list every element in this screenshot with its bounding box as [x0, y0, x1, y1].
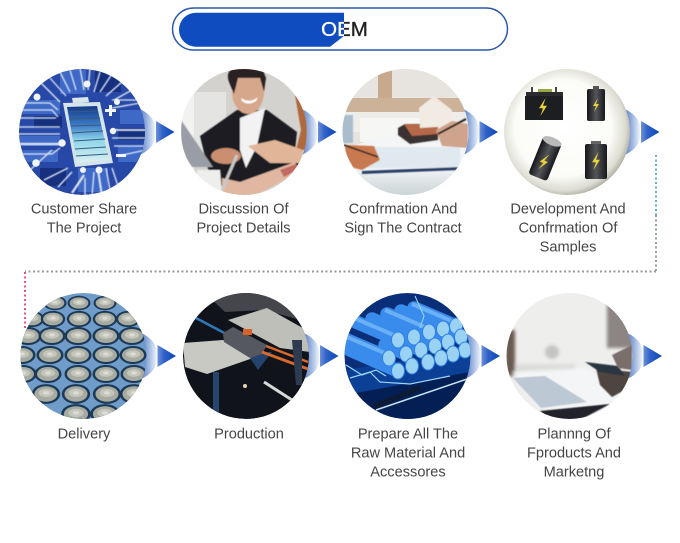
photo: laptop and phone [505, 293, 635, 420]
step 3: confirmation and sign the contract [340, 68, 498, 236]
step 5: delivery [8, 293, 176, 442]
photo: businessman in discussion [180, 68, 308, 196]
photo: battery samples [504, 69, 630, 195]
photo: rows of battery cells [20, 293, 146, 419]
label: Accessores [370, 464, 446, 480]
title banner: OEM [172, 8, 508, 50]
photo: battery pack assembly [183, 293, 310, 419]
step 8: planning of products and marketing [505, 293, 662, 480]
label: Raw Material And [351, 446, 465, 462]
photo: battery on circuit board [18, 68, 146, 196]
label: Delivery [58, 426, 111, 442]
step 2: discussion of project details [180, 68, 336, 236]
label: Prepare All The [358, 426, 458, 442]
label: The Project [47, 220, 121, 236]
photo: signing a contract [340, 68, 470, 196]
label: Confrmation And [349, 202, 457, 218]
label: Customer Share [31, 202, 137, 218]
label: Discussion Of [198, 202, 289, 218]
label: Confrmation Of [519, 220, 618, 236]
step 7: prepare all the raw material and accessories [344, 293, 500, 480]
icon: cylinder battery bottom [585, 141, 607, 179]
label: Plannng Of [537, 426, 611, 442]
label: Marketng [544, 464, 604, 480]
step 1: customer share the project [18, 68, 174, 236]
connector: dotted line between rows [25, 155, 656, 330]
step 6: production [183, 293, 338, 442]
photo: blue cylindrical cells [344, 293, 472, 420]
label: Sign The Contract [344, 220, 462, 236]
icon: cylinder battery top [587, 86, 605, 121]
label: Fproducts And [527, 446, 621, 462]
title banner: OEM: OEM [321, 18, 368, 41]
icon: car battery [525, 87, 563, 120]
label: Project Details [196, 220, 291, 236]
icon: tilted cell battery [528, 134, 563, 181]
step 4: development and confirmation of samples [504, 69, 660, 256]
label: Development And [510, 202, 626, 218]
icon: battery [63, 97, 113, 167]
label: Samples [540, 240, 596, 256]
label: Production [214, 426, 284, 442]
